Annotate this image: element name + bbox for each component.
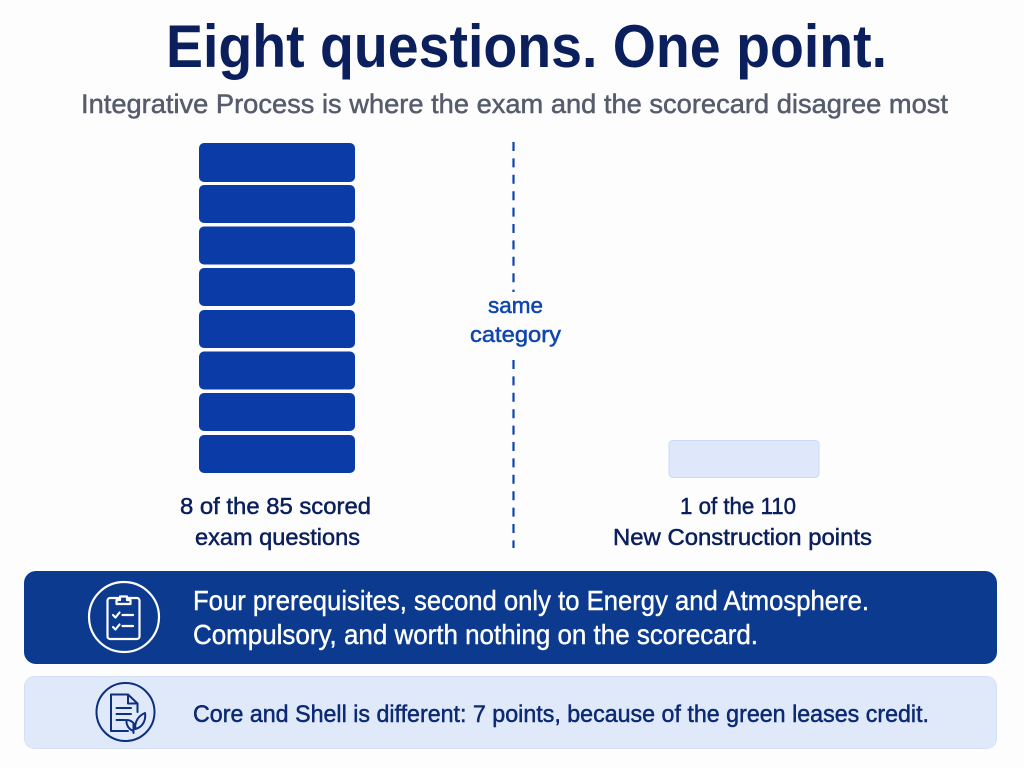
divider: dashed line — [512, 142, 515, 548]
left bar caption — [180, 493, 371, 550]
left bar caption: exam questions — [195, 524, 360, 550]
banner text: Four prerequisites, second only to Energy and Atmosphere. — [193, 585, 869, 616]
single pale bar: 1 point — [669, 440, 819, 478]
divider label: category — [470, 322, 562, 347]
right bar caption — [613, 493, 872, 550]
right bar caption: New Construction points — [613, 524, 872, 550]
right bar caption: 1 of the 110 — [680, 493, 796, 519]
panel: prerequisites banner — [24, 571, 997, 664]
panel: Core and Shell note — [24, 676, 996, 748]
icon: document with leaf — [96, 683, 154, 741]
subtitle: Integrative Process is where the exam and the scorecard disagree most — [81, 89, 948, 119]
banner text — [193, 585, 869, 650]
banner text: Compulsory, and worth nothing on the scorecard. — [193, 619, 758, 650]
stacked bars: 8 exam questions — [199, 143, 355, 473]
divider label — [470, 293, 562, 347]
note text: Core and Shell is different: 7 points, because of the green leases credit. — [193, 701, 929, 728]
icon: clipboard checklist — [89, 582, 159, 652]
divider label: same — [488, 293, 543, 318]
left bar caption: 8 of the 85 scored — [180, 493, 371, 519]
title: Eight questions. One point. — [166, 13, 887, 80]
